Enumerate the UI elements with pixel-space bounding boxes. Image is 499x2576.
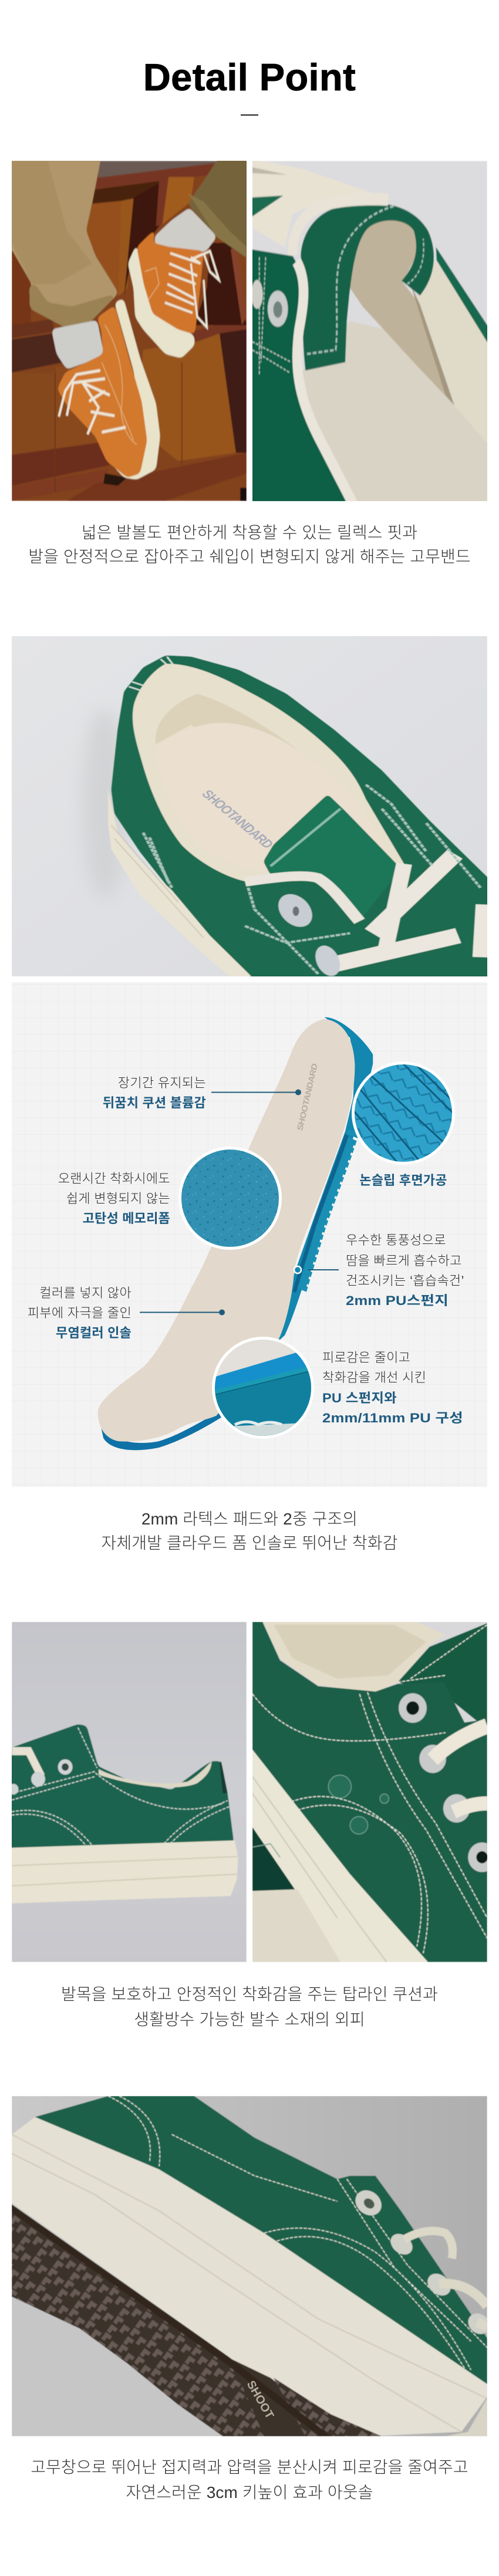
callout: PU composition: 피로감은 줄이고 — [322, 1350, 410, 1365]
caption 1: 발을 안정적으로 잡아주고 쉐입이 변형되지 않게 해주는 고무밴드 — [28, 547, 471, 566]
lower shoe laces — [59, 370, 126, 434]
callout: dye-free print: 컬러를 넣지 않아 — [39, 1286, 132, 1300]
right trouser leg — [189, 161, 247, 259]
callout: memory foam text: 고탄성 메모리폼 — [83, 1211, 170, 1226]
stairs background — [12, 161, 247, 501]
heel stitches — [129, 657, 173, 690]
callout: memory foam text: 쉽게 변형되지 않는 — [66, 1191, 170, 1206]
photo: water-repellent canvas close-up — [252, 1622, 496, 1962]
right collar strip — [436, 247, 490, 347]
caption 4: 자연스러운 3cm 키높이 효과 아웃솔 — [126, 2483, 373, 2501]
eyelets — [272, 890, 319, 931]
heel recess — [156, 694, 295, 748]
insole print: SHOOTANDARD — [198, 787, 277, 851]
lower shoe upper — [58, 306, 147, 478]
insole illustration — [98, 1017, 373, 1450]
right sock — [154, 208, 217, 252]
callout inset: memory foam — [178, 1147, 282, 1250]
lining interior — [262, 1622, 446, 1692]
callout: non-slip text: 논슬립 후면가공 — [359, 1173, 447, 1188]
callout: dye-free print: 피부에 자극을 줄인 — [28, 1306, 132, 1320]
collar front binding — [245, 876, 359, 921]
photo: outsole close-up — [12, 2096, 494, 2436]
callout: memory foam text: 오랜시간 착화시에도 — [58, 1171, 170, 1186]
caption 4: 고무창으로 뛰어난 접지력과 압력을 분산시켜 피로감을 줄여주고 — [31, 2458, 468, 2476]
caption 4 — [31, 2458, 468, 2501]
upper shoe sole — [128, 244, 195, 358]
sole — [9, 1840, 238, 1904]
lining — [99, 1762, 211, 1787]
midsole — [12, 2117, 487, 2436]
callout: PU sponge: 건조시키는 ‘흡습속건’ — [346, 1273, 464, 1288]
left sock — [52, 320, 104, 369]
panel: insole diagram — [12, 982, 487, 1487]
callout: heel cushion: 뒤꿈치 쿠션 볼륨감 — [103, 1096, 206, 1110]
photo: green shoe collar close-up — [250, 158, 490, 504]
callout: heel cushion — [103, 1076, 301, 1110]
photo: orange shoes on stairs — [8, 157, 251, 501]
stitching — [108, 2096, 487, 2370]
right lining — [417, 259, 490, 447]
caption 3 — [61, 1985, 438, 2029]
callout: dye-free print — [28, 1286, 225, 1340]
bottom-left background — [12, 2297, 222, 2436]
lower shoe sole — [114, 298, 161, 481]
photo: insole inside green shoe — [12, 636, 493, 981]
tongue — [264, 795, 401, 921]
front cream binding — [296, 261, 353, 504]
eyelets — [268, 290, 288, 327]
caption 1: 넓은 발볼도 편안하게 착용할 수 있는 릴렉스 핏과 — [82, 523, 417, 542]
insole — [154, 723, 388, 873]
outsole tread — [12, 2205, 331, 2436]
stitching — [252, 1625, 487, 1953]
eyelets — [58, 1759, 73, 1774]
laces — [404, 2231, 453, 2259]
laces top — [252, 161, 369, 246]
caption 3: 생활방수 가능한 발수 소재의 외피 — [134, 2010, 365, 2029]
sole — [108, 790, 251, 976]
upper shoe laces — [165, 251, 219, 327]
title dash — [241, 114, 258, 116]
callout: heel cushion: 장기간 유지되는 — [118, 1076, 206, 1090]
stitching — [143, 785, 480, 974]
callout inset: PU layers — [211, 1337, 317, 1439]
upper — [35, 2096, 487, 2384]
stitching — [12, 1728, 229, 1845]
photo: green shoe side view — [6, 1622, 247, 1962]
laces — [334, 854, 484, 964]
callout: PU composition: PU 스펀지와 — [322, 1391, 397, 1405]
water droplets — [328, 1775, 389, 1834]
eyelets — [399, 1693, 496, 1872]
laces — [433, 1726, 487, 1760]
upper — [6, 1724, 234, 1854]
stitches — [252, 257, 291, 374]
green outer shell — [112, 655, 493, 981]
callout: PU composition — [322, 1350, 463, 1425]
inner wall — [350, 218, 454, 405]
callout: PU composition: 2mm/11mm PU 구성 — [322, 1411, 463, 1425]
ribbed edge — [302, 1139, 352, 1289]
callout: PU sponge: 2mm PU스펀지 — [346, 1293, 449, 1308]
callout: PU sponge: 땀을 빠르게 흡수하고 — [346, 1253, 462, 1268]
caption 2: 2mm 라텍스 패드와 2중 구조의 — [141, 1510, 358, 1528]
callout: dye-free print: 무염컬러 인솔 — [56, 1326, 132, 1340]
left trouser leg — [12, 161, 117, 307]
lace — [12, 1751, 41, 1776]
caption 2 — [102, 1510, 397, 1552]
collar lining — [133, 664, 404, 885]
shadow on background — [83, 714, 125, 892]
callout: PU sponge — [294, 1233, 464, 1308]
blue bottom edge — [100, 1413, 222, 1450]
insole surface — [302, 321, 490, 504]
eyelets — [350, 2185, 494, 2338]
upper shoe upper — [137, 228, 204, 334]
front green quarter — [252, 249, 346, 501]
insole top surface — [98, 1019, 355, 1442]
title: Detail Point — [143, 56, 356, 99]
caption 1 — [28, 523, 471, 566]
callout: memory foam text — [58, 1171, 170, 1226]
callout: PU sponge: 우수한 통풍성으로 — [346, 1233, 446, 1248]
caption 3: 발목을 보호하고 안정적인 착화감을 주는 탑라인 쿠션과 — [61, 1985, 438, 2003]
rear green collar — [301, 203, 434, 370]
insole lettering: SHOOTANDARD — [296, 1062, 319, 1132]
upper background quarter — [398, 1623, 487, 1729]
second shoe below — [252, 1827, 296, 1891]
callout: PU composition: 착화감을 개선 시킨 — [322, 1370, 426, 1385]
callout inset: non-slip — [352, 1060, 458, 1165]
outsole logo: SHOOT — [244, 2379, 276, 2421]
sole — [252, 1749, 428, 1962]
caption 2: 자체개발 클라우드 폼 인솔로 뛰어난 착화감 — [102, 1534, 397, 1552]
blue side wall — [277, 1017, 373, 1343]
green quarter — [252, 1622, 487, 1962]
cream binding — [292, 199, 388, 255]
